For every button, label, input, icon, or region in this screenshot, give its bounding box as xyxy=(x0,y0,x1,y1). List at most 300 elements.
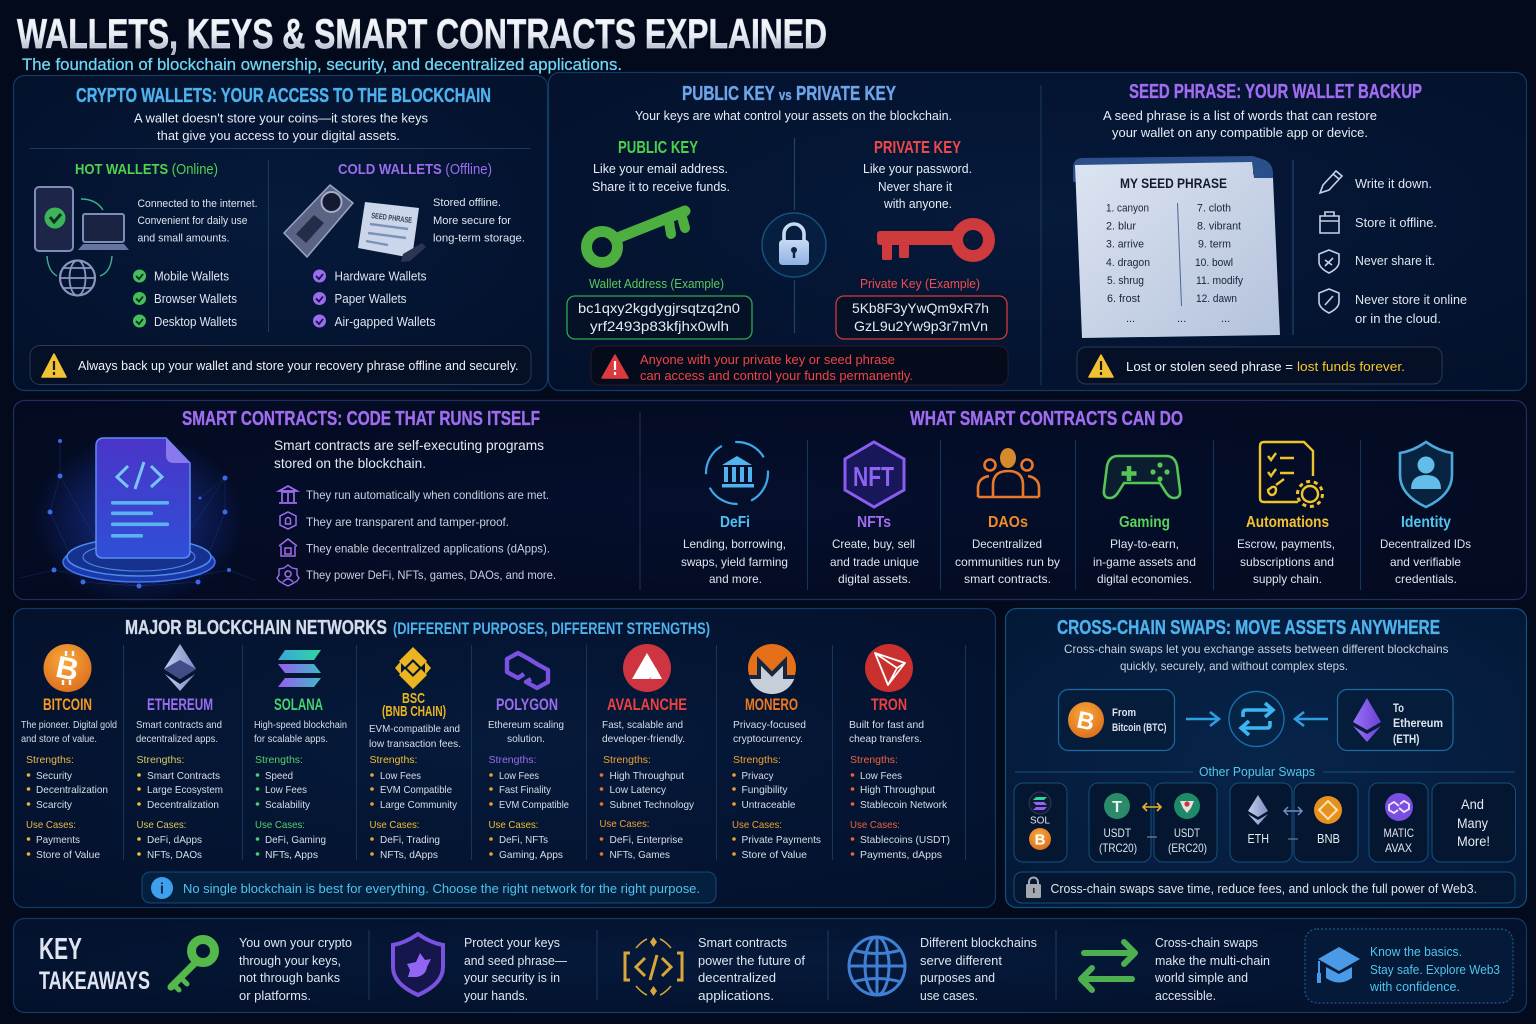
use case: identity xyxy=(1380,442,1471,586)
heading: key takeaways xyxy=(39,931,150,995)
seed word list: 11. modify xyxy=(1196,275,1243,287)
use case: gaming: Play-to-earn, xyxy=(1110,537,1179,551)
title: WALLETS, KEYS & SMART CONTRACTS EXPLAINED xyxy=(17,10,827,57)
takeaway: ownership: You own your crypto xyxy=(239,935,352,950)
icon: power badge xyxy=(277,565,299,586)
callout: know the basics: with confidence. xyxy=(1369,980,1460,994)
network: ethereum: Decentralization xyxy=(147,799,219,811)
network: polygon: POLYGON xyxy=(496,695,558,714)
network: avalanche: developer-friendly. xyxy=(602,733,685,745)
seed phrase safety tips xyxy=(1319,171,1342,313)
wallet address box: yrf2493p83kfjhx0wlh xyxy=(590,318,729,334)
text: safety tips: Write it down. xyxy=(1355,176,1432,191)
seed word list: 1. canyon xyxy=(1106,202,1149,214)
intro text: your wallet on any compatible app or device. xyxy=(1112,125,1368,140)
intro text: stored on the blockchain. xyxy=(274,455,426,471)
intro text xyxy=(1103,108,1377,140)
text: safety tips xyxy=(1355,176,1467,326)
network: bsc: Low Fees xyxy=(380,770,421,782)
swap to ethereum: (ETH) xyxy=(1393,732,1420,746)
takeaway: different blockchains: use cases. xyxy=(920,988,978,1003)
column: public key xyxy=(567,137,752,339)
network: tron: High Throughput xyxy=(860,784,935,796)
icon: hardware wallet and seed paper: SEED PHRASE xyxy=(371,211,413,225)
text: safety tips: Never store it online xyxy=(1355,292,1467,307)
network: avalanche: Low Latency xyxy=(610,784,667,796)
heading: seed phrase: SEED PHRASE: YOUR WALLET BACKUP xyxy=(1129,81,1422,103)
intro text: that give you access to your digital assets. xyxy=(157,128,400,143)
seed word list: ... xyxy=(1221,313,1230,325)
swap: eth to bnb: ETH xyxy=(1248,831,1269,846)
use case: NFTs: Create, buy, sell xyxy=(832,537,915,551)
network: polygon: Fast Finality xyxy=(499,784,552,796)
swap: matic and avax: MATIC xyxy=(1384,826,1414,840)
use case: gaming: in-game assets and xyxy=(1093,555,1196,569)
subheading: different purposes: (DIFFERENT PURPOSES, DIFFERENT STRENGTHS) xyxy=(393,619,710,638)
use case: identity: Decentralized IDs xyxy=(1380,537,1471,551)
network: monero: Privacy xyxy=(742,770,774,782)
seed word list: 2. blur xyxy=(1106,220,1136,232)
takeaway: ownership xyxy=(239,935,352,1003)
network: bsc: Use Cases: xyxy=(370,819,420,831)
takeaway: ownership: through your keys, xyxy=(239,953,341,968)
takeaway: protect keys: and seed phrase— xyxy=(464,953,567,968)
network: tron: cheap transfers. xyxy=(849,733,922,745)
intro text xyxy=(274,437,544,471)
swap: matic and avax: AVAX xyxy=(1385,841,1412,855)
intro text: Smart contracts are self-executing programs xyxy=(274,437,544,453)
callout: private key danger: Anyone with your private key or seed phrase xyxy=(640,352,895,367)
icon: bnb xyxy=(395,647,431,689)
icon: phone, laptop and globe xyxy=(35,187,129,296)
callout: know the basics xyxy=(1305,929,1513,1003)
intro text xyxy=(134,110,428,143)
heading: smart contracts: SMART CONTRACTS: CODE THAT RUNS ITSELF xyxy=(182,408,540,430)
list: hot wallet types: Mobile Wallets xyxy=(154,270,229,284)
network: ethereum: Smart Contracts xyxy=(147,770,220,782)
use case: identity: credentials. xyxy=(1395,572,1457,586)
network: ethereum: Smart contracts and xyxy=(136,719,222,731)
seed word list: 7. cloth xyxy=(1197,202,1231,214)
network: monero: Privacy-focused xyxy=(733,719,806,731)
network: avalanche xyxy=(600,644,695,861)
column: private key xyxy=(836,137,1007,339)
seed word list: ... xyxy=(1126,313,1135,325)
column: private key: Like your password. xyxy=(863,161,972,176)
use case: gaming: Gaming xyxy=(1119,514,1170,531)
network: bitcoin: Store of Value xyxy=(36,849,100,861)
use case: gaming: digital economies. xyxy=(1097,572,1192,586)
heading: hot wallets: HOT WALLETS (Online) xyxy=(75,161,218,178)
network: monero: cryptocurrency. xyxy=(733,733,803,745)
use case: DeFi: DeFi xyxy=(720,514,750,531)
callout: cross-chain benefits xyxy=(1014,872,1515,903)
network: tron xyxy=(849,644,950,861)
network: bitcoin: The pioneer. Digital gold xyxy=(21,719,117,731)
column: private key: Private Key (Example) xyxy=(860,277,980,291)
panel: major blockchain networks xyxy=(14,608,996,908)
callout: know the basics: Stay safe. Explore Web3 xyxy=(1370,963,1500,977)
takeaway: ownership: not through banks xyxy=(239,970,340,985)
arrow: out of swap xyxy=(1295,712,1328,726)
network: ethereum xyxy=(136,644,223,861)
private key box: 5Kb8F3yYwQm9xR7h xyxy=(852,300,989,316)
use case: DeFi: swaps, yield farming xyxy=(681,555,788,569)
label: other popular swaps: Other Popular Swaps xyxy=(1199,765,1315,779)
seed word list: 6. frost xyxy=(1107,293,1140,305)
takeaway: protect keys: your security is in xyxy=(464,970,560,985)
list: hot wallet types: Browser Wallets xyxy=(154,292,237,306)
icon: shield xyxy=(393,934,443,995)
icon: storage case xyxy=(1320,212,1339,233)
network: polygon: Use Cases: xyxy=(488,819,538,831)
seed word list xyxy=(1106,202,1243,325)
icon: avalanche xyxy=(623,644,671,692)
swap: sol to btc: SOL xyxy=(1030,816,1050,826)
heading: public vs private: PUBLIC KEY vs PRIVATE KEY xyxy=(682,83,897,105)
icon: padlock xyxy=(762,213,826,277)
network: bitcoin xyxy=(21,644,117,861)
wallet address box: bc1qxy2kgdygjrsqtzq2n0 xyxy=(578,300,740,316)
use case: DAOs: Decentralized xyxy=(972,537,1042,551)
network: bitcoin: Payments xyxy=(36,834,80,846)
panel: cross-chain swaps xyxy=(1006,608,1526,908)
swap: usdt trc20 to erc20: (ERC20) xyxy=(1168,841,1207,855)
callout: lost seed phrase: lost funds forever. xyxy=(1297,359,1405,374)
icon: solana xyxy=(278,650,321,687)
subtitle: The foundation of blockchain ownership, security, and decentralized applications. xyxy=(22,55,622,74)
use case: DAOs xyxy=(955,448,1060,586)
icon: monero xyxy=(748,644,796,694)
icon: swap arrows xyxy=(1081,942,1135,990)
icon: bitcoin xyxy=(44,644,92,692)
network: avalanche: Subnet Technology xyxy=(610,799,695,811)
intro text xyxy=(1064,642,1448,673)
network: tron: TRON xyxy=(871,695,907,714)
wallet address box xyxy=(567,296,752,339)
network: bitcoin: Scarcity xyxy=(36,799,73,811)
network: monero: MONERO xyxy=(745,695,798,714)
arrow: into swap xyxy=(1186,712,1219,726)
heading: key takeaways: KEY xyxy=(39,931,82,966)
takeaway: smart contracts xyxy=(698,935,805,1003)
takeaway: cross-chain swaps: Cross-chain swaps xyxy=(1155,935,1258,950)
seed word list: 3. arrive xyxy=(1106,238,1144,250)
swap from bitcoin xyxy=(1058,690,1174,750)
network: ethereum: DeFi, dApps xyxy=(147,834,202,846)
callout: lost seed phrase: Lost or stolen seed phrase = xyxy=(1126,359,1293,374)
use case: NFTs: and trade unique xyxy=(830,555,919,569)
network: bsc: Large Community xyxy=(380,799,458,811)
takeaway: smart contracts: power the future of xyxy=(698,953,805,968)
callout: cross-chain benefits: Cross-chain swaps save time, reduce fees, and unlock the full power of Web3. xyxy=(1050,882,1477,896)
network: solana: for scalable apps. xyxy=(254,733,328,745)
swap to ethereum xyxy=(1338,690,1453,750)
network: solana: Strengths: xyxy=(255,754,303,766)
network: tron: Low Fees xyxy=(860,770,902,782)
callout: know the basics: Know the basics. xyxy=(1370,945,1462,959)
use case: identity: and verifiable xyxy=(1390,555,1461,569)
use case: NFTs xyxy=(830,442,919,586)
heading: what smart contracts can do: WHAT SMART CONTRACTS CAN DO xyxy=(910,408,1183,430)
swap from bitcoin: From xyxy=(1112,707,1136,719)
takeaway: cross-chain swaps: make the multi-chain xyxy=(1155,953,1270,968)
callout: lost seed phrase xyxy=(1077,347,1442,384)
swap from bitcoin: Bitcoin (BTC) xyxy=(1112,722,1167,734)
network: polygon: Gaming, Apps xyxy=(499,849,563,861)
network: solana: NFTs, Apps xyxy=(265,849,318,861)
network: monero: Untraceable xyxy=(742,799,796,811)
seed phrase paper: MY SEED PHRASE xyxy=(1120,175,1227,191)
network: bitcoin: BITCOIN xyxy=(43,695,92,714)
heading: key takeaways: TAKEAWAYS xyxy=(39,967,150,995)
network: bitcoin: Strengths: xyxy=(26,754,74,766)
icon: hardware wallet and seed paper xyxy=(284,185,426,262)
icon: globe xyxy=(849,937,905,995)
use case: DAOs: smart contracts. xyxy=(964,572,1051,586)
icon: ethereum xyxy=(164,644,196,691)
network: avalanche: NFTs, Games xyxy=(610,849,670,861)
network: ethereum: Use Cases: xyxy=(136,819,186,831)
network: tron: Strengths: xyxy=(850,754,898,766)
takeaway: cross-chain swaps: accessible. xyxy=(1155,988,1216,1003)
use case: NFTs: NFTs xyxy=(857,514,891,531)
list: smart contract properties: They are transparent and tamper-proof. xyxy=(306,515,509,529)
takeaway: protect keys xyxy=(464,935,567,1003)
network: solana: Use Cases: xyxy=(255,819,305,831)
icon: swap circle xyxy=(1229,692,1284,746)
network: ethereum: ETHEREUM xyxy=(147,695,213,714)
network: tron: Payments, dApps xyxy=(860,849,942,861)
use case: DAOs: DAOs xyxy=(988,514,1028,531)
swap from bitcoin: B xyxy=(1074,706,1097,736)
network: monero: Use Cases: xyxy=(732,819,782,831)
seed word list: 9. term xyxy=(1198,238,1231,250)
list: smart contract properties: They enable decentralized applications (dApps). xyxy=(306,542,550,556)
seed word list: 4. dragon xyxy=(1106,257,1150,269)
use case: automations: Escrow, payments, xyxy=(1237,537,1335,551)
swap: eth to bnb: BNB xyxy=(1317,831,1340,846)
private key box: GzL9u2Yw9p3r7mVn xyxy=(854,318,988,334)
box: and many more: And xyxy=(1461,796,1484,812)
icon: bank xyxy=(279,486,297,503)
text: safety tips: or in the cloud. xyxy=(1355,311,1441,326)
use case: automations: subscriptions and xyxy=(1240,555,1334,569)
heading: cold wallets: COLD WALLETS (Offline) xyxy=(338,161,492,178)
swap: usdt trc20 to erc20 xyxy=(1089,783,1217,862)
icon: green key xyxy=(171,940,214,990)
network: bsc: DeFi, Trading xyxy=(380,834,440,846)
swap: usdt trc20 to erc20: (TRC20) xyxy=(1099,841,1137,855)
network: bsc: (BNB CHAIN) xyxy=(382,703,446,720)
text: hot wallets description: and small amounts. xyxy=(138,232,230,244)
takeaway: different blockchains: purposes and xyxy=(920,970,995,985)
network: solana: SOLANA xyxy=(274,695,323,714)
callout: no single blockchain xyxy=(142,872,716,903)
box: and many more: More! xyxy=(1457,833,1490,849)
takeaway: smart contracts: decentralized xyxy=(698,970,776,985)
callout: private key danger: can access and control your funds permanently. xyxy=(640,368,913,383)
text: cold wallets description: Stored offline. xyxy=(433,197,501,209)
network: avalanche: DeFi, Enterprise xyxy=(610,834,683,846)
list: smart contract properties xyxy=(277,486,556,586)
network: bitcoin: Use Cases: xyxy=(26,819,76,831)
column: public key: PUBLIC KEY xyxy=(618,137,698,157)
network: polygon: solution. xyxy=(507,733,545,745)
callout: private key danger xyxy=(591,346,1008,385)
seed word list: 5. shrug xyxy=(1107,275,1144,287)
private key box xyxy=(836,296,1007,339)
icon: bitcoin: B xyxy=(53,649,82,688)
network: tron: Stablecoins (USDT) xyxy=(860,834,950,846)
callout: no single blockchain: i xyxy=(160,880,164,898)
use case: DeFi xyxy=(681,442,788,586)
network: polygon: DeFi, NFTs xyxy=(499,834,548,846)
network: solana: Speed xyxy=(265,770,293,782)
text: cold wallets description xyxy=(433,197,525,244)
network: tron: Built for fast and xyxy=(849,719,924,731)
network: bsc xyxy=(369,647,461,861)
network: monero: Private Payments xyxy=(742,834,821,846)
network: bsc: EVM-compatible and xyxy=(369,723,460,735)
column: private key: PRIVATE KEY xyxy=(874,137,961,157)
takeaway: ownership: or platforms. xyxy=(239,988,311,1003)
column: public key: Wallet Address (Example) xyxy=(589,277,724,291)
icon: tron xyxy=(865,644,913,692)
callout: back up wallet xyxy=(30,346,531,384)
network: bsc: NFTs, dApps xyxy=(380,849,438,861)
use case: gaming xyxy=(1093,456,1196,586)
seed word list: 8. vibrant xyxy=(1197,220,1241,232)
use case: DAOs: communities run by xyxy=(955,555,1060,569)
illustration: glowing code document xyxy=(20,435,255,605)
icon: shield xyxy=(1319,250,1339,273)
text: cold wallets description: More secure for xyxy=(433,215,511,227)
swap: usdt trc20 to erc20: USDT xyxy=(1104,826,1132,840)
seed word list: 12. dawn xyxy=(1196,293,1237,305)
seed word list: ... xyxy=(1177,313,1186,325)
intro text: quickly, securely, and without complex steps. xyxy=(1120,659,1348,673)
network: solana: High-speed blockchain xyxy=(254,719,347,731)
network: avalanche: Strengths: xyxy=(603,754,651,766)
takeaway: different blockchains: serve different xyxy=(920,953,1002,968)
takeaway: cross-chain swaps xyxy=(1154,935,1270,1003)
text: safety tips: Store it offline. xyxy=(1355,215,1437,230)
network: bitcoin: and store of value. xyxy=(21,733,97,745)
icon: red key xyxy=(877,224,989,260)
icon: pencil xyxy=(1320,171,1342,193)
network: monero xyxy=(732,644,821,861)
takeaway: protect keys: your hands. xyxy=(464,988,528,1003)
icon: green key xyxy=(586,211,685,262)
swap to ethereum: Ethereum xyxy=(1393,716,1443,730)
network: ethereum: decentralized apps. xyxy=(136,733,218,745)
icon: shield with cloud strike xyxy=(1319,289,1339,313)
text: hot wallets description: Connected to the internet. xyxy=(138,198,258,210)
seed phrase paper xyxy=(1073,156,1280,338)
column: private key: with anyone. xyxy=(883,196,952,211)
takeaway: smart contracts: applications. xyxy=(698,988,774,1003)
takeaway: protect keys: Protect your keys xyxy=(464,935,560,950)
list: hot wallet types: Desktop Wallets xyxy=(154,315,237,329)
intro text: A wallet doesn't store your coins—it stores the keys xyxy=(134,110,428,126)
network: tron: Stablecoin Network xyxy=(860,799,948,811)
column: public key: Share it to receive funds. xyxy=(592,179,730,194)
list: cold wallet types xyxy=(313,270,436,329)
network: avalanche: High Throughput xyxy=(610,770,684,782)
panel: crypto wallets xyxy=(14,76,548,390)
intro text: A seed phrase is a list of words that can restore xyxy=(1103,108,1377,123)
panel: key takeaways xyxy=(14,918,1526,1012)
list: cold wallet types: Air-gapped Wallets xyxy=(334,315,436,329)
text: safety tips: Never share it. xyxy=(1355,253,1435,268)
network: monero: Fungibility xyxy=(742,784,788,796)
use case: identity: Identity xyxy=(1401,514,1451,531)
icon: code brackets xyxy=(625,937,682,996)
network: polygon: Strengths: xyxy=(488,754,536,766)
network: solana: Low Fees xyxy=(265,784,307,796)
network: polygon xyxy=(488,653,569,861)
network: avalanche: Fast, scalable and xyxy=(602,719,683,731)
column: public key: Like your email address. xyxy=(593,161,728,176)
takeaway: smart contracts: Smart contracts xyxy=(698,935,787,950)
network: monero: Store of Value xyxy=(742,849,807,861)
text: cold wallets description: long-term storage. xyxy=(433,232,525,244)
network: ethereum: Large Ecosystem xyxy=(147,784,223,796)
network: ethereum: NFTs, DAOs xyxy=(147,849,202,861)
box: and many more: Many xyxy=(1457,815,1488,831)
network: solana xyxy=(254,650,347,861)
use case: NFTs: NFT xyxy=(853,461,894,492)
takeaway: different blockchains xyxy=(920,935,1037,1003)
text: hot wallets description: Convenient for daily use xyxy=(138,215,248,227)
list: hot wallet types xyxy=(133,270,237,329)
network: bitcoin: Security xyxy=(36,770,73,782)
network: bitcoin: Decentralization xyxy=(36,784,108,796)
callout: no single blockchain: No single blockchain is best for everything. Choose the right network for the right purpose. xyxy=(183,881,700,896)
network: avalanche: AVALANCHE xyxy=(607,695,687,714)
network: polygon: EVM Compatible xyxy=(499,799,569,811)
swap: matic and avax xyxy=(1369,783,1428,862)
network: ethereum: Strengths: xyxy=(136,754,184,766)
icon: polygon xyxy=(507,653,548,688)
use case: DeFi: and more. xyxy=(709,572,762,586)
intro text: Cross-chain swaps let you exchange assets between different blockchains xyxy=(1064,642,1448,656)
icon: hex lock xyxy=(280,512,296,529)
use case: NFTs: digital assets. xyxy=(838,572,911,586)
text: hot wallets description xyxy=(138,198,258,244)
use case: automations: supply chain. xyxy=(1253,572,1322,586)
network: monero: Strengths: xyxy=(733,754,781,766)
network: bsc: Strengths: xyxy=(370,754,418,766)
box: and many more xyxy=(1432,783,1516,862)
use case: automations: Automations xyxy=(1246,514,1329,531)
list: smart contract properties: They run automatically when conditions are met. xyxy=(306,488,549,502)
callout: back up wallet: Always back up your wallet and store your recovery phrase offline and securely. xyxy=(78,358,518,373)
network: tron: Use Cases: xyxy=(850,819,900,831)
intro text: Your keys are what control your assets on the blockchain. xyxy=(635,108,952,123)
network: bsc: EVM Compatible xyxy=(380,784,452,796)
swap: sol to btc: B xyxy=(1035,832,1046,848)
panel: smart contracts xyxy=(14,400,1526,605)
heading: major blockchain networks: MAJOR BLOCKCHAIN NETWORKS xyxy=(125,617,387,639)
column: private key: Never share it xyxy=(878,179,952,194)
list: smart contract properties: They power DeFi, NFTs, games, DAOs, and more. xyxy=(306,568,556,582)
list: cold wallet types: Hardware Wallets xyxy=(334,270,426,284)
swap: sol to btc xyxy=(1014,783,1067,862)
seed word list: 10. bowl xyxy=(1195,257,1233,269)
network: solana: DeFi, Gaming xyxy=(265,834,326,846)
